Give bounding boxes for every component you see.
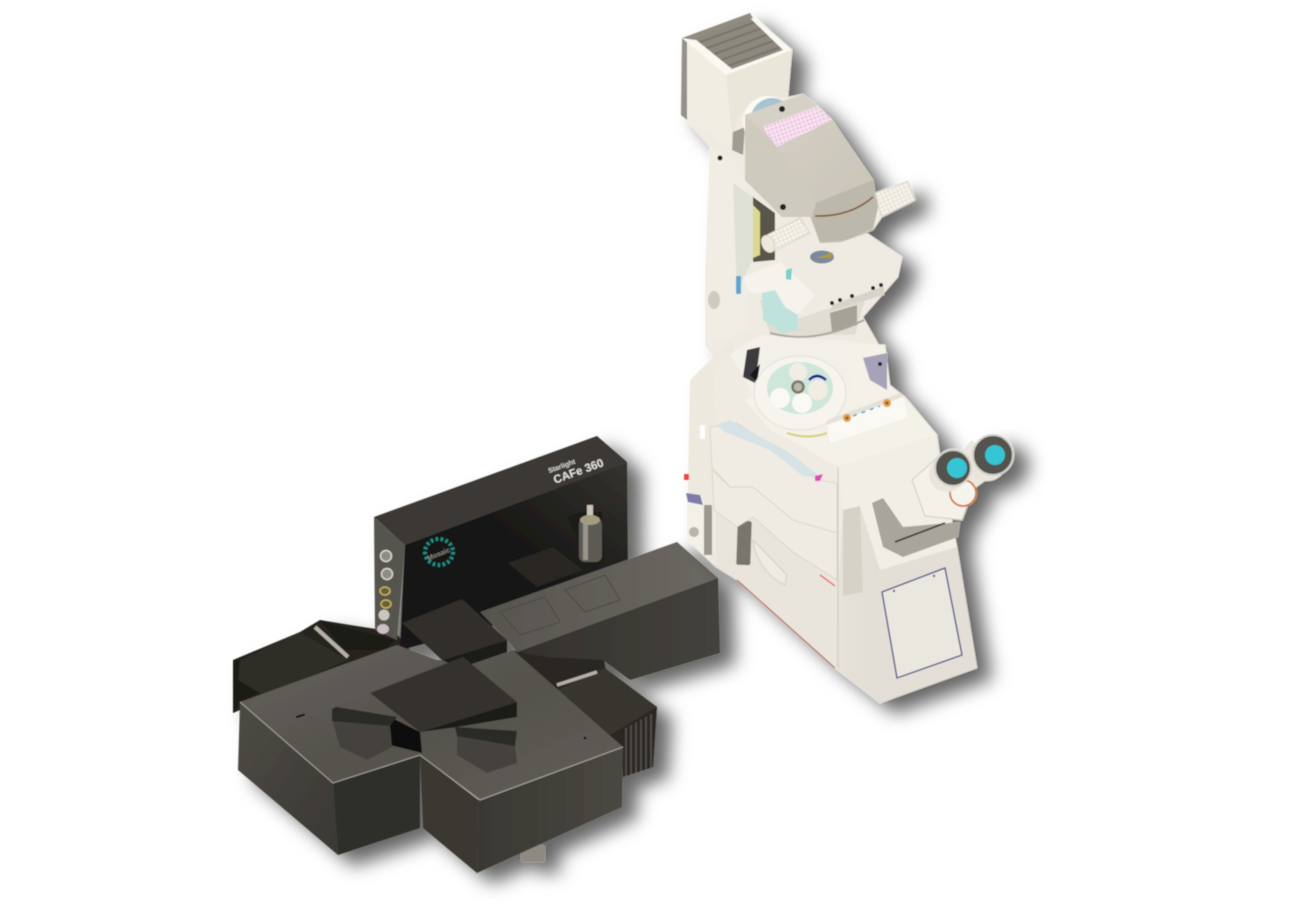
front rail with orange screws	[827, 393, 908, 443]
lower body left strip	[684, 340, 740, 567]
microscope	[681, 13, 1013, 703]
side module: right detector	[510, 650, 657, 777]
observation head	[745, 94, 878, 243]
logo	[425, 539, 453, 565]
vial	[567, 505, 604, 568]
product name: CAFe 360	[552, 457, 605, 487]
nosepiece dome	[754, 340, 858, 436]
connector panel	[377, 550, 392, 634]
main body block	[238, 645, 623, 873]
central plate with beam ports	[332, 657, 517, 773]
logo: Mosaic	[427, 547, 451, 562]
binocular eyepieces	[912, 435, 1013, 520]
stand front and lower housing	[835, 437, 977, 703]
stand front lower panel	[710, 470, 840, 668]
focus knob: left	[759, 218, 810, 255]
stand layered covers	[710, 420, 837, 580]
top plate	[240, 645, 623, 800]
recess left and purple plate right	[743, 347, 887, 390]
blue ring	[743, 96, 794, 148]
product name: Starlight	[547, 458, 577, 475]
access window panel	[882, 568, 962, 678]
side module: left detector	[233, 620, 410, 713]
dark optical instrument	[233, 436, 720, 873]
column	[705, 147, 775, 345]
controller box labelled CAFe 360	[374, 436, 628, 650]
microscope silhouette base	[681, 13, 977, 703]
focus knob: right	[875, 181, 915, 217]
stage assembly	[743, 233, 902, 337]
long arm	[480, 542, 720, 680]
lamp housing	[681, 13, 792, 155]
eyepiece holder	[872, 498, 960, 557]
deck	[713, 335, 937, 467]
foot	[521, 845, 545, 862]
rear cover block	[402, 599, 507, 668]
